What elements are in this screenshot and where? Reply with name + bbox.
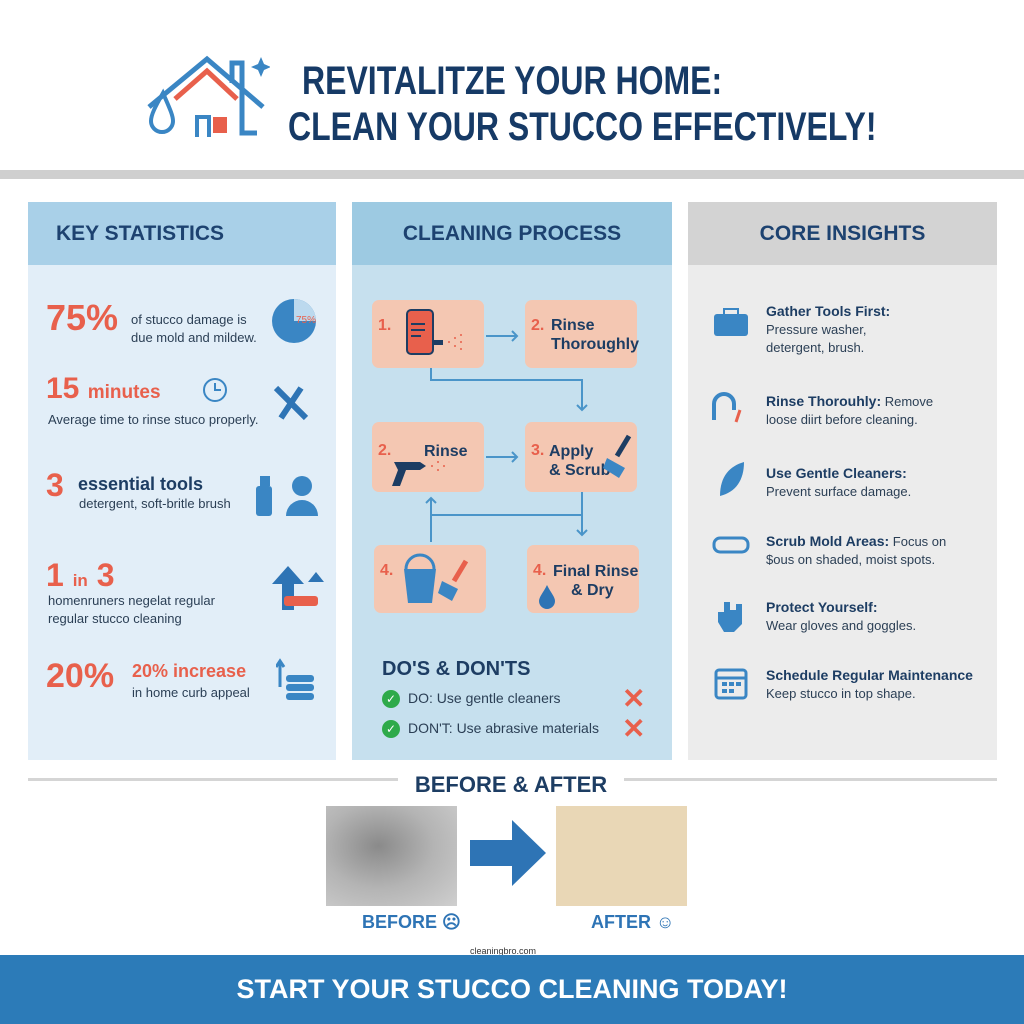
insight 6: Keep stucco in top shape. (766, 686, 916, 701)
insight 1: detergent, brush. (766, 340, 864, 355)
after image (556, 806, 687, 906)
stat 3 tools: detergent, soft-britle brush (79, 496, 231, 511)
insight 3: Use Gentle Cleaners: (766, 465, 907, 481)
insight 6: Schedule Regular Maintenance (766, 667, 973, 683)
do's and don'ts: DO: Use gentle cleaners (408, 690, 561, 706)
step 4 final rinse (527, 545, 639, 613)
label before: BEFORE ☹ (362, 912, 461, 932)
insight 3: Prevent surface damage. (766, 484, 911, 499)
heading: key statistics (28, 202, 336, 265)
step 4 bucket: 4. (380, 562, 393, 579)
do's and don'ts (382, 658, 645, 744)
title: CLEAN YOUR STUCCO EFFECTIVELY! (288, 105, 876, 149)
before & after section (28, 772, 997, 932)
stat 75%: 75% (46, 297, 118, 338)
heading: core insights (688, 202, 997, 265)
stat 75%: of stucco damage is (131, 312, 247, 327)
step 4 final rinse: & Dry (571, 582, 614, 599)
stat 15 minutes (46, 372, 308, 427)
insight 1: Pressure washer, (766, 322, 866, 337)
stat 15 minutes: Average time to rinse stuco properly. (48, 412, 259, 427)
step 2 rinse thoroughly (525, 300, 637, 368)
stat 1 in 3: regular stucco cleaning (48, 611, 182, 626)
step 2 rinse: Rinse (424, 443, 468, 460)
step 3 apply & scrub (525, 422, 637, 492)
stat 3 tools (46, 467, 318, 516)
step 4 final rinse: Final Rinse (553, 563, 638, 580)
insight 5: Protect Yourself: (766, 599, 878, 615)
do's and don'ts: ✕ (622, 713, 645, 744)
step 4 bucket (374, 545, 486, 613)
insight 6 (766, 667, 973, 701)
step 2 rinse: 2. (378, 442, 391, 459)
insight 3 (766, 465, 911, 499)
insight 5: Wear gloves and goggles. (766, 618, 916, 633)
step 2 rinse (372, 422, 484, 492)
before image (326, 806, 457, 906)
step 2 rinse thoroughly: Thoroughly (551, 336, 639, 353)
insight 2: loose diirt before cleaning. (766, 412, 918, 427)
stat 20%: 20% (46, 657, 114, 695)
do's and don'ts: DO'S & DON'TS (382, 658, 530, 680)
heading: core insights: CORE INSIGHTS (760, 222, 925, 244)
insight 1 (766, 303, 890, 355)
step 2 rinse thoroughly: Rinse (551, 317, 595, 334)
step 3 apply & scrub: & Scrub (549, 462, 610, 479)
footer banner (0, 955, 1024, 1024)
flow arrows (425, 330, 588, 542)
title (288, 59, 876, 149)
stat 3 tools: essential tools (78, 474, 203, 494)
arrow (470, 820, 546, 886)
step 1 (372, 300, 484, 368)
stat 1 in 3: 1 in 3 (46, 557, 114, 593)
stat 15 minutes: 15 minutes (46, 372, 161, 405)
do's and don'ts: ✓ (386, 692, 396, 706)
panel: key statistics (28, 202, 336, 760)
heading: cleaning process (352, 202, 672, 265)
step 3 apply & scrub: Apply (549, 443, 593, 460)
insight 4: Scrub Mold Areas: Focus on (766, 533, 946, 549)
stat 20%: in home curb appeal (132, 685, 250, 700)
insight 4: $ous on shaded, moist spots. (766, 552, 935, 567)
label after: AFTER ☺ (591, 912, 674, 932)
stat 1 in 3 (46, 557, 324, 626)
do's and don'ts: ✕ (622, 683, 645, 714)
do's and don'ts: DON'T: Use abrasive materials (408, 720, 599, 736)
footer banner: START YOUR STUCCO CLEANING TODAY! (236, 974, 788, 1004)
insight 5 (766, 599, 916, 633)
insight 1: Gather Tools First: (766, 303, 890, 319)
heading: cleaning process: CLEANING PROCESS (403, 222, 621, 244)
step 4 final rinse: 4. (533, 562, 546, 579)
step 1: 1. (378, 317, 391, 334)
panel: cleaning process (352, 202, 672, 760)
insight 2 (766, 393, 933, 427)
stat 20%: 20% increase (132, 661, 246, 681)
do's and don'ts: ✓ (386, 722, 396, 736)
stat 1 in 3: homenruners negelat regular (48, 593, 215, 608)
icon: house logo (148, 56, 270, 137)
url: cleaningbro.com (470, 946, 536, 956)
heading: key statistics: KEY STATISTICS (56, 222, 224, 244)
step 2 rinse thoroughly: 2. (531, 317, 544, 334)
stat 75% (46, 297, 316, 345)
title: REVITALITZE YOUR HOME: (302, 59, 722, 103)
stat 3 tools: 3 (46, 467, 64, 503)
heading: before & after: BEFORE & AFTER (415, 772, 607, 797)
panel: core insights (688, 202, 997, 760)
header (0, 0, 1024, 170)
stat 20% (46, 657, 314, 700)
insight 2: Rinse Thorouhly: Remove (766, 393, 933, 409)
stat 75%: due mold and mildew. (131, 330, 257, 345)
stat 75%: 75% (296, 315, 316, 326)
insight 4 (766, 533, 946, 567)
step 3 apply & scrub: 3. (531, 442, 544, 459)
